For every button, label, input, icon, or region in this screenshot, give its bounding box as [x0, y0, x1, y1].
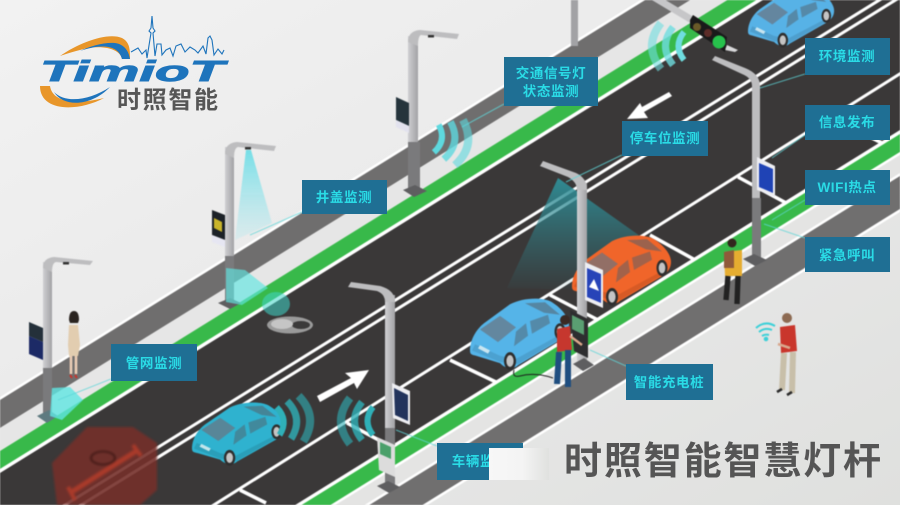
person: man at charger [557, 315, 582, 387]
logo chinese name: 时照智能 [117, 87, 218, 114]
road arrow: left [627, 92, 672, 119]
label: 紧急呼叫: 紧急呼叫 [819, 247, 875, 263]
lamp pole 7 with sign and kiosk [348, 282, 410, 493]
label: 智能充电桩: 智能充电桩 [634, 374, 704, 390]
label: 井盖监测: 井盖监测 [316, 189, 372, 205]
label: WIFI热点 [805, 170, 890, 205]
connector lines [58, 74, 805, 446]
lower sidewalk and gray strip [366, 174, 900, 505]
label: 信息发布: 信息发布 [819, 114, 875, 130]
lamp pole 6 with traffic light [652, 0, 775, 266]
label: WIFI热点: WIFI热点 [817, 179, 877, 195]
white cover patch [489, 448, 549, 480]
light cone: manhole sensor [235, 150, 272, 240]
lower green strip [295, 130, 900, 505]
lamp pole 1 with sign [29, 257, 93, 423]
underground pipe red zone [52, 427, 157, 505]
lamp pole 4 top [571, 0, 578, 46]
label: 停车位监测 [622, 121, 708, 156]
sensor waves: car [276, 395, 312, 444]
car: blue top right [748, 0, 834, 48]
label: 车辆监测: 车辆监测 [452, 453, 508, 469]
lamp pole 3 with sign [396, 30, 459, 197]
label: 停车位监测: 停车位监测 [630, 130, 700, 146]
manhole cover [267, 316, 313, 334]
cyan glow above manhole [262, 292, 290, 316]
icon: wifi signal [756, 323, 775, 340]
lamp pole 2 with sign [212, 142, 276, 309]
sensor waves: pole [341, 398, 373, 444]
person: woman by first pole [68, 311, 80, 378]
label: 管网监测: 管网监测 [126, 355, 182, 371]
lamp pole 5 with sign and charger [540, 161, 603, 371]
title: 时照智能智慧灯杆 [564, 441, 881, 483]
upper sidewalk and gray strip [0, 0, 727, 451]
sensor waves: traffic signal [652, 23, 684, 69]
road arrow: right [317, 370, 369, 402]
parking stall lines [240, 122, 884, 503]
logo wordmark Timiot: TimioT [40, 56, 228, 88]
label: 信息发布 [805, 105, 890, 140]
label: 环境监测: 环境监测 [819, 48, 875, 64]
charging cable [514, 370, 553, 378]
upper green strip [0, 0, 756, 469]
label: 交通信号灯状态监测: 交通信号灯 [516, 65, 586, 81]
light cone: parking sensor [507, 178, 640, 290]
person: pedestrian with backpack [724, 238, 742, 304]
label: 交通信号灯状态监测: 状态监测 [523, 83, 579, 99]
label: 管网监测 [111, 344, 197, 381]
label: 井盖监测 [302, 180, 387, 214]
person: man with phone [777, 313, 797, 395]
sensor waves: lamp three [432, 116, 472, 167]
car: teal on road [192, 403, 285, 466]
label: 智能充电桩 [626, 364, 713, 400]
label: 紧急呼叫 [805, 237, 890, 272]
logo swoosh arcs [40, 36, 130, 107]
label: 车辆监测 [437, 443, 523, 480]
logo skyline [131, 16, 224, 58]
car: orange parked [572, 236, 671, 306]
logo [40, 16, 228, 114]
label: 交通信号灯状态监测 [504, 57, 598, 106]
car: blue parked [470, 299, 569, 370]
label: 环境监测 [805, 38, 890, 75]
